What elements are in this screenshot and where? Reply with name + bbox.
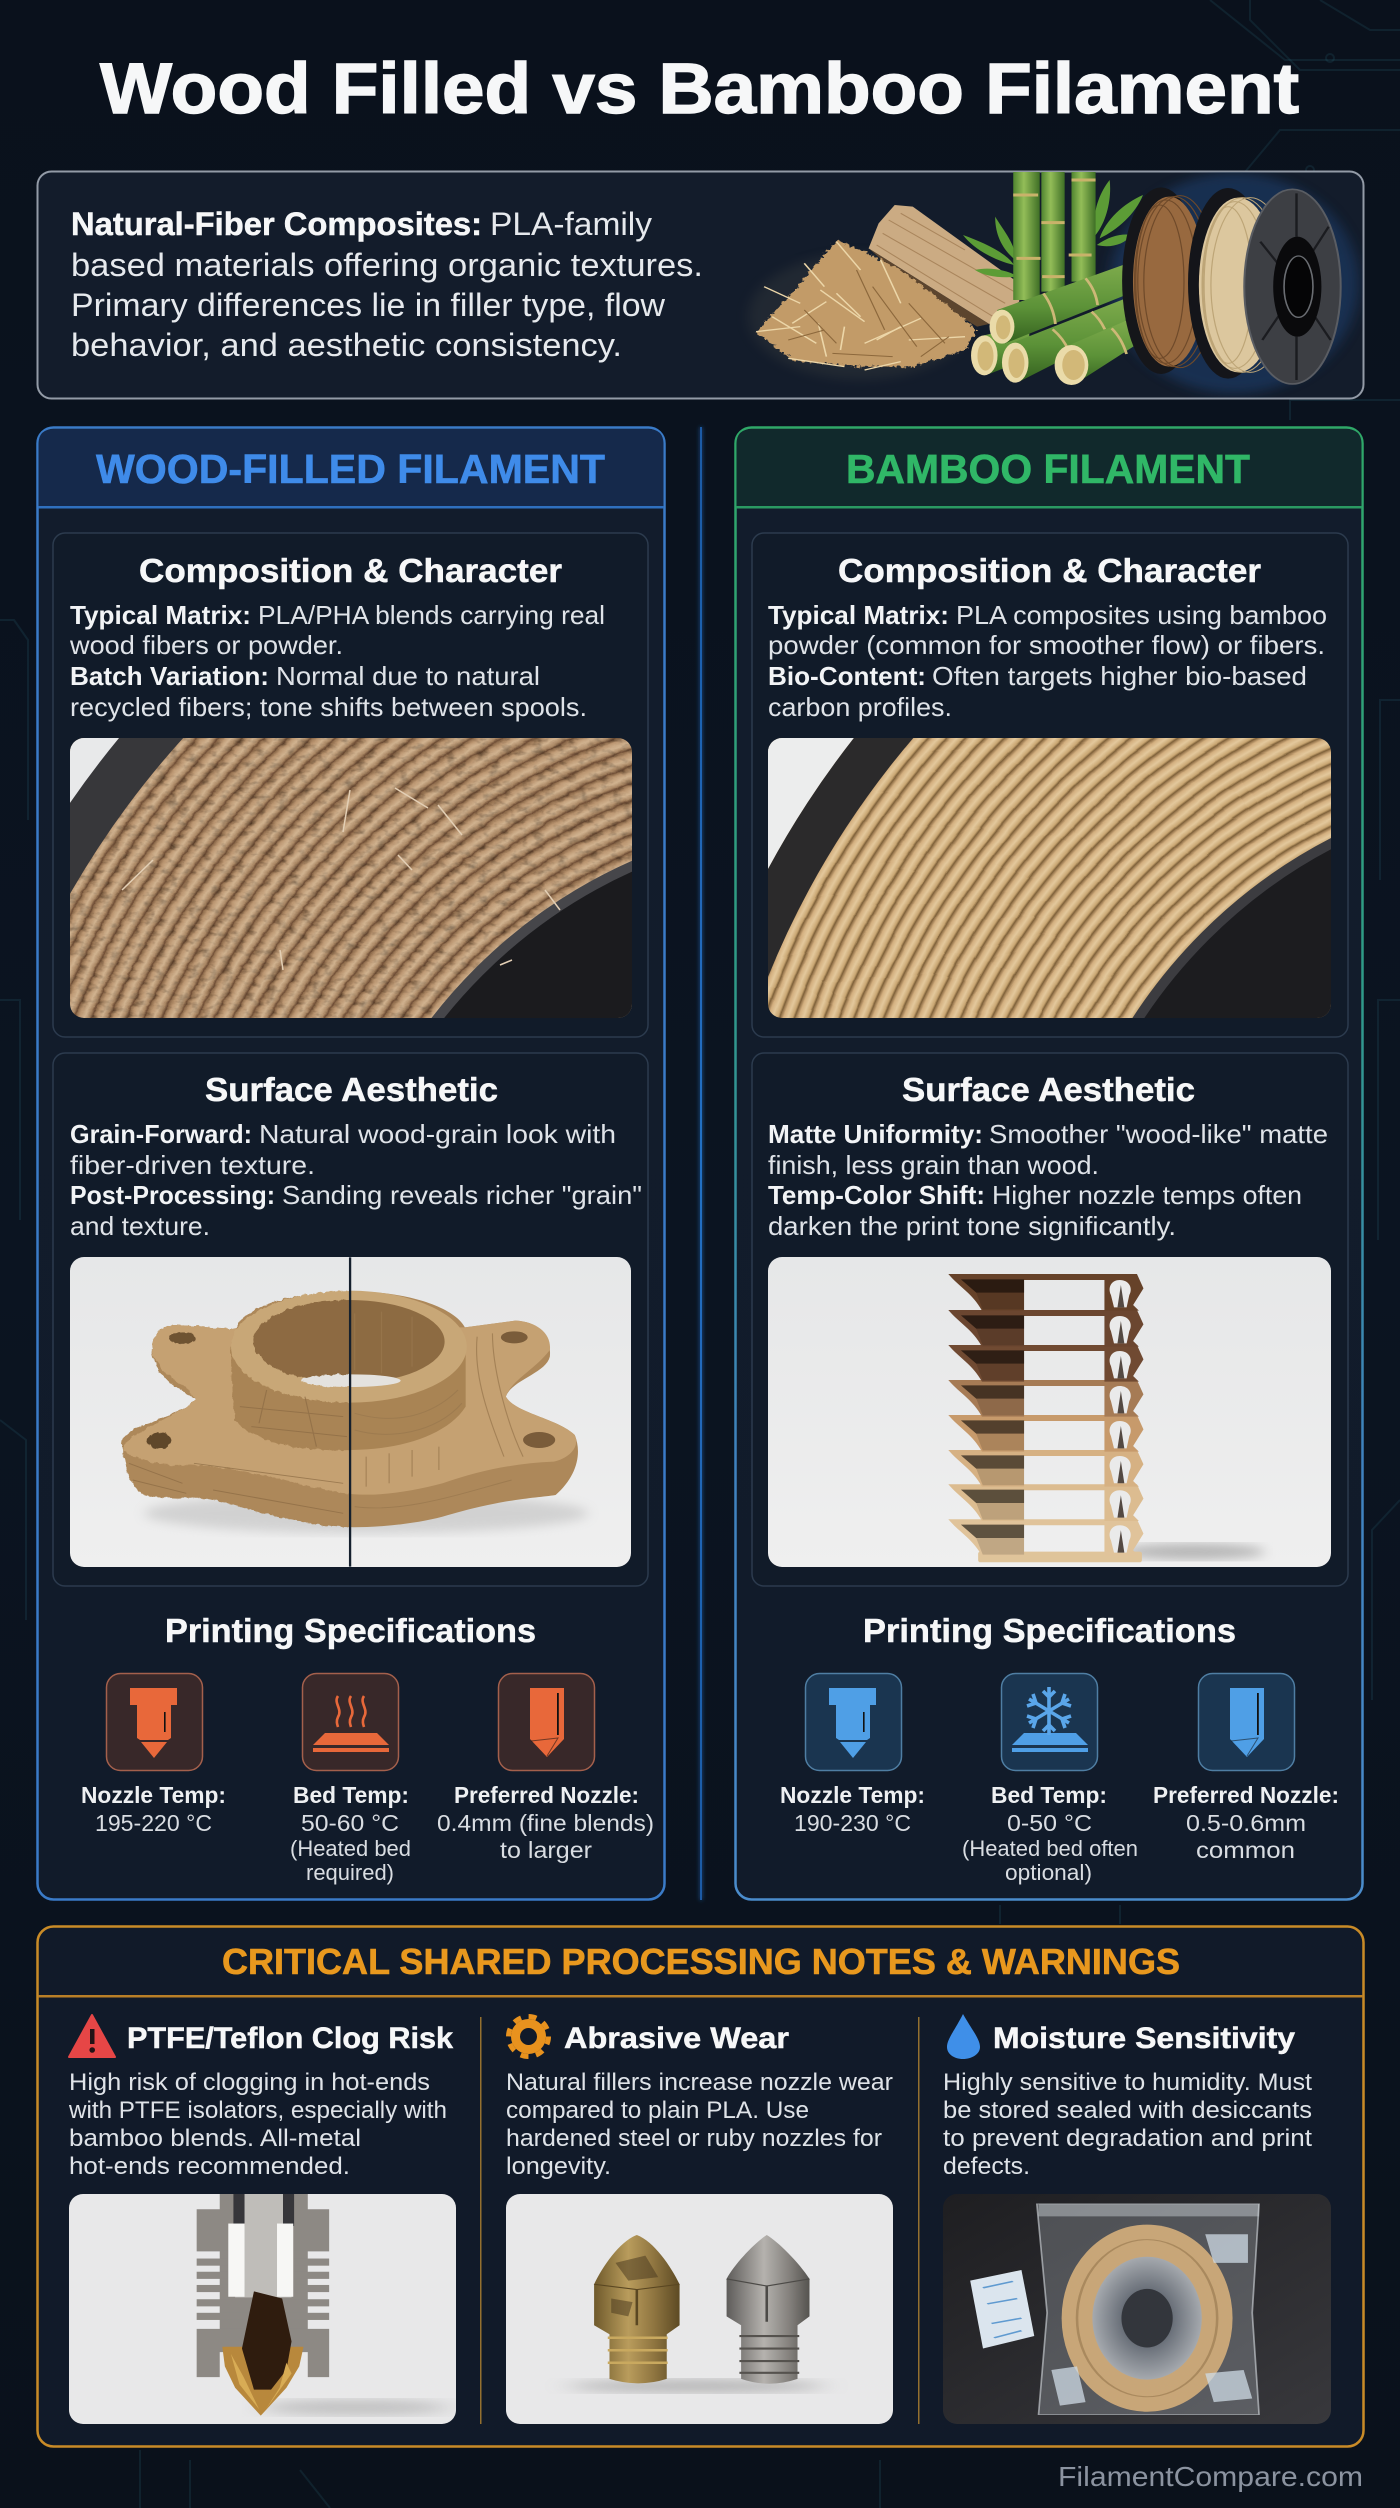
note text: clog: hot-ends recommended. <box>69 2153 350 2180</box>
note: abrasive wear <box>506 2016 893 2424</box>
heading: printing specifications (wood): Printing Specifications <box>165 1612 536 1649</box>
photo: bamboo filament spool close-up <box>768 738 1331 1018</box>
icon: nozzle temp (bamboo) <box>806 1674 902 1770</box>
note text: moisture: defects. <box>943 2153 1030 2180</box>
sub-panel: composition and character (bamboo): Composition & Character <box>838 552 1261 589</box>
sub-panel: composition and character (bamboo) <box>751 532 1349 1038</box>
brown spool <box>1122 188 1202 374</box>
composition text: Typical Matrix: <box>768 600 949 630</box>
note text: moisture: to prevent degradation and print <box>943 2125 1312 2152</box>
fiber pile <box>756 240 977 370</box>
spec: preferred nozzle (bamboo): Preferred Nozzle: <box>1153 1782 1339 1808</box>
icon: water drop <box>947 2014 980 2059</box>
photo: clogged hot-end cross-section <box>69 2194 456 2424</box>
icon: nozzle temp (wood) <box>106 1674 202 1770</box>
spec: bed temp (wood): (Heated bed <box>290 1836 411 1861</box>
spec: preferred nozzle (bamboo): 0.5-0.6mm <box>1186 1810 1306 1836</box>
hero illustration: fibers, bamboo and spools <box>748 172 1359 393</box>
note text: clog: bamboo blends. All-metal <box>69 2125 361 2152</box>
center divider <box>700 427 702 1900</box>
note: abrasive wear: Abrasive Wear <box>564 2022 789 2055</box>
surface text: Grain-Forward: <box>70 1119 252 1149</box>
icon: warning triangle <box>69 2015 115 2057</box>
note: PTFE clog risk: PTFE/Teflon Clog Risk <box>127 2022 453 2055</box>
sub-panel: composition and character (wood): Composition & Character <box>139 552 562 589</box>
spec: nozzle temp (bamboo): Nozzle Temp: <box>780 1782 925 1808</box>
icon: gear <box>508 2016 548 2056</box>
heading band: bamboo: BAMBOO FILAMENT <box>846 446 1250 492</box>
intro text block <box>71 206 703 363</box>
surface text: Higher nozzle temps often <box>992 1180 1302 1210</box>
composition text: Normal due to natural <box>276 661 540 691</box>
spec: nozzle temp (bamboo): 190-230 °C <box>794 1810 911 1836</box>
composition text <box>69 600 605 722</box>
spec: nozzle temp (wood): 195-220 °C <box>95 1810 212 1836</box>
note text: clog: High risk of clogging in hot-ends <box>69 2069 430 2096</box>
note: PTFE clog risk <box>68 2015 456 2424</box>
spec: bed temp (wood) <box>290 1782 411 1885</box>
spec: nozzle temp (wood) <box>81 1782 226 1836</box>
spec: bed temp (bamboo) <box>962 1782 1138 1885</box>
composition text: powder (common for smoother flow) or fibers. <box>768 630 1325 660</box>
icon: snowflake bed <box>1002 1674 1098 1770</box>
spec: bed temp (bamboo): (Heated bed often <box>962 1836 1138 1861</box>
heading band: wood-filled <box>38 429 664 508</box>
intro text block: based materials offering organic textures. <box>71 247 703 283</box>
surface text: Matte Uniformity: <box>768 1119 983 1149</box>
surface text: and texture. <box>70 1211 210 1241</box>
photo: brass and steel nozzles <box>506 2194 893 2424</box>
note text: abrasive: compared to plain PLA. Use <box>506 2097 809 2124</box>
icon: preferred nozzle (bamboo) <box>1198 1674 1294 1770</box>
sub-panel: composition and character (wood) <box>52 532 649 1038</box>
composition text: recycled fibers; tone shifts between spools. <box>70 692 587 722</box>
panel: bamboo filament <box>734 426 1364 1901</box>
panel: wood-filled filament <box>36 426 666 1901</box>
heading: printing specifications (bamboo): Printing Specifications <box>863 1612 1236 1649</box>
spec: bed temp (bamboo): optional) <box>1005 1860 1092 1885</box>
sub-panel: surface aesthetic (wood) <box>53 1053 648 1586</box>
spec: preferred nozzle (bamboo): common <box>1196 1837 1295 1863</box>
photo: sealed spool with desiccants <box>943 2194 1331 2424</box>
spec: bed temp (wood): 50-60 °C <box>301 1810 399 1836</box>
bamboo stalks and leaves <box>963 172 1143 300</box>
note: moisture sensitivity <box>943 2014 1331 2424</box>
composition text: PLA composites using bamboo <box>956 600 1327 630</box>
note: moisture sensitivity: Moisture Sensitivity <box>993 2022 1295 2055</box>
note text: clog <box>68 2069 447 2180</box>
spec: bed temp (wood): Bed Temp: <box>293 1782 409 1808</box>
icon: preferred nozzle (wood) <box>498 1674 594 1770</box>
spec: bed temp (bamboo): Bed Temp: <box>991 1782 1107 1808</box>
sub-panel: surface aesthetic (wood): Surface Aesthetic <box>205 1071 498 1108</box>
surface text: fiber-driven texture. <box>70 1150 315 1180</box>
composition text: Often targets higher bio-based <box>932 661 1307 691</box>
composition text: wood fibers or powder. <box>69 630 343 660</box>
bamboo cut stems <box>971 264 1136 385</box>
composition text: Bio-Content: <box>768 661 926 691</box>
note text: abrasive <box>506 2069 893 2180</box>
heading band: wood-filled: WOOD-FILLED FILAMENT <box>96 446 605 492</box>
spec: preferred nozzle (wood): 0.4mm (fine blends) <box>437 1810 654 1836</box>
intro text block: Primary differences lie in filler type, flow <box>71 287 666 323</box>
footer source: FilamentCompare.com <box>1058 2461 1363 2492</box>
note text: moisture: Highly sensitive to humidity. Must <box>943 2069 1312 2096</box>
warnings heading: CRITICAL SHARED PROCESSING NOTES & WARNINGS <box>222 1941 1180 1982</box>
intro text block: behavior, and aesthetic consistency. <box>71 327 622 363</box>
spec: preferred nozzle (wood): Preferred Nozzle: <box>454 1782 639 1808</box>
icon: heated bed <box>302 1674 398 1770</box>
intro text block: PLA-family <box>490 206 652 242</box>
surface text: darken the print tone significantly. <box>768 1211 1176 1241</box>
wood chunk <box>869 205 1019 327</box>
spec: bed temp (bamboo): 0-50 °C <box>1007 1810 1092 1836</box>
title: Wood Filled vs Bamboo Filament <box>100 50 1299 129</box>
spec: bed temp (wood): required) <box>306 1860 394 1885</box>
sub-panel: surface aesthetic (bamboo): Surface Aesthetic <box>902 1071 1195 1108</box>
note text: abrasive: Natural fillers increase nozzle wear <box>506 2069 893 2096</box>
tan spool <box>1188 188 1341 384</box>
composition text <box>768 600 1327 722</box>
panel: intro <box>38 172 1364 398</box>
sub-panel: surface aesthetic (bamboo) <box>752 1053 1348 1586</box>
composition text: carbon profiles. <box>768 692 952 722</box>
note text: clog: with PTFE isolators, especially with <box>68 2097 447 2124</box>
composition text: Typical Matrix: <box>70 600 251 630</box>
surface text <box>768 1119 1328 1241</box>
surface text: Natural wood-grain look with <box>259 1119 616 1149</box>
surface text: finish, less grain than wood. <box>768 1150 1099 1180</box>
spec: nozzle temp (wood): Nozzle Temp: <box>81 1782 226 1808</box>
note text: moisture: be stored sealed with desiccants <box>943 2097 1312 2124</box>
panel: critical shared notes <box>38 1926 1364 2446</box>
surface text: Smoother "wood-like" matte <box>989 1119 1328 1149</box>
intro text block: Natural-Fiber Composites: <box>71 206 482 242</box>
surface text <box>70 1119 642 1241</box>
note text: abrasive: longevity. <box>506 2153 611 2180</box>
note text: moisture <box>943 2069 1312 2180</box>
heading band: bamboo <box>736 429 1362 508</box>
photo: temperature tower <box>768 1257 1331 1567</box>
spec: preferred nozzle (wood): to larger <box>500 1837 592 1863</box>
note text: abrasive: hardened steel or ruby nozzles for <box>506 2125 882 2152</box>
surface text: Temp-Color Shift: <box>768 1180 985 1210</box>
spec: nozzle temp (bamboo) <box>780 1782 925 1836</box>
surface text: Post-Processing: <box>70 1180 275 1210</box>
spec: preferred nozzle (wood) <box>437 1782 654 1863</box>
surface text: Sanding reveals richer "grain" <box>282 1180 642 1210</box>
photo: wood filament spool close-up <box>70 738 632 1018</box>
composition text: Batch Variation: <box>70 661 269 691</box>
composition text: PLA/PHA blends carrying real <box>258 600 605 630</box>
photo: rough versus sanded wood flange <box>70 1257 631 1567</box>
spec: preferred nozzle (bamboo) <box>1153 1782 1339 1863</box>
